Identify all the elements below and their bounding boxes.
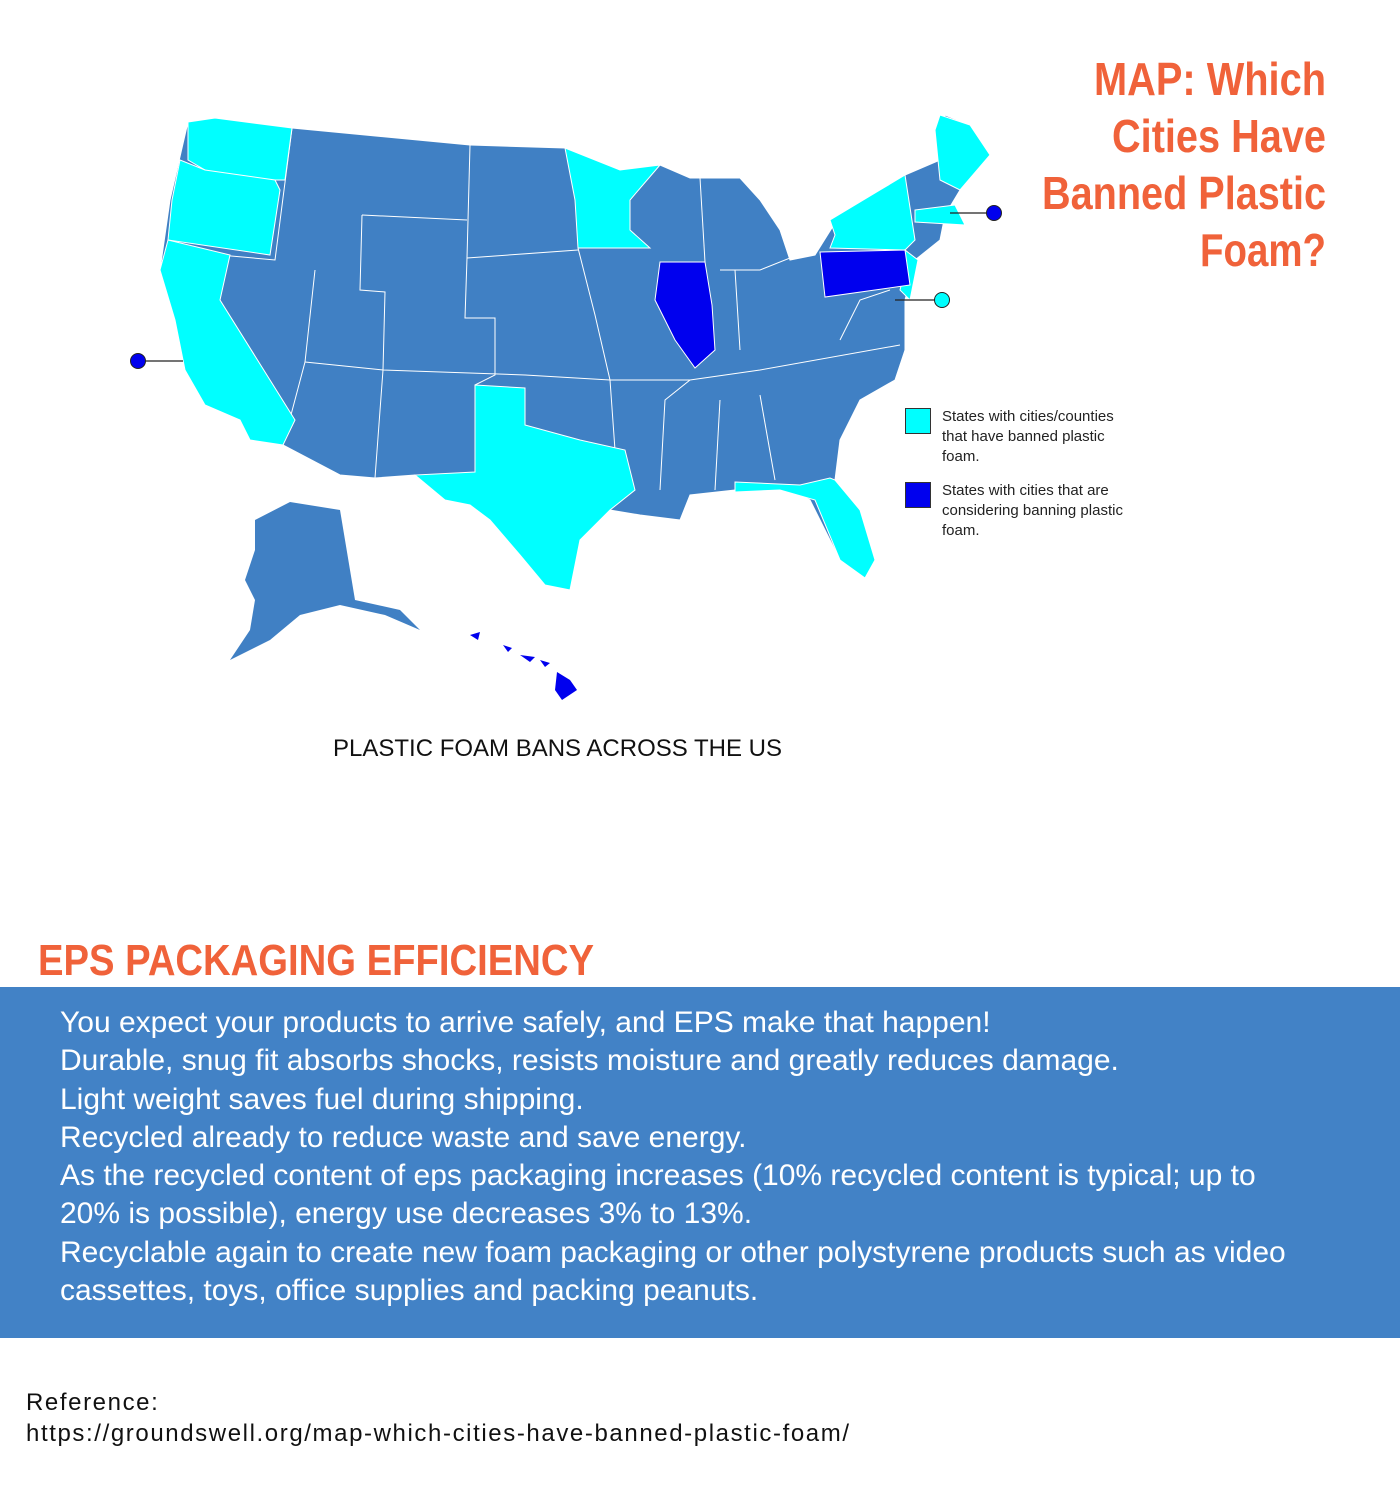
panel: EPS text: Durable, snug fit absorbs shocks, resists moisture and greatly reduces damage. [60,1044,1119,1077]
panel: EPS text: You expect your products to arrive safely, and EPS make that happen! [60,1006,991,1039]
hawaii [470,632,577,700]
dark blue states [655,250,910,368]
panel: EPS text: Recycled already to reduce waste and save energy. [60,1121,746,1154]
reference: Reference: [26,1389,159,1416]
legend item blue: States with cities that are considering banning plastic foam. [942,482,1123,539]
reference: https://groundswell.org/map-which-cities-have-banned-plastic-foam/ [26,1420,851,1447]
alaska [230,502,420,660]
reference [26,1389,851,1447]
panel: EPS text: Recyclable again to create new foam packaging or other polystyrene products such as video cassettes, toys, office supplies and packing peanuts. [60,1236,1286,1307]
legend [905,408,1123,539]
panel: EPS text [0,987,1400,1338]
title [1042,53,1326,276]
map [130,116,1002,700]
legend item cyan: States with cities/counties that have banned plastic foam. [942,408,1114,465]
cyan states [160,115,990,590]
lower 48 outline [160,115,990,590]
panel: EPS text: As the recycled content of eps packaging increases (10% recycled content is typical; up to 20% is possible), energy use decreases 3% to 13%. [60,1159,1256,1230]
panel: EPS text: Light weight saves fuel during shipping. [60,1083,584,1116]
callouts [138,213,994,361]
map caption: PLASTIC FOAM BANS ACROSS THE US [333,735,782,762]
